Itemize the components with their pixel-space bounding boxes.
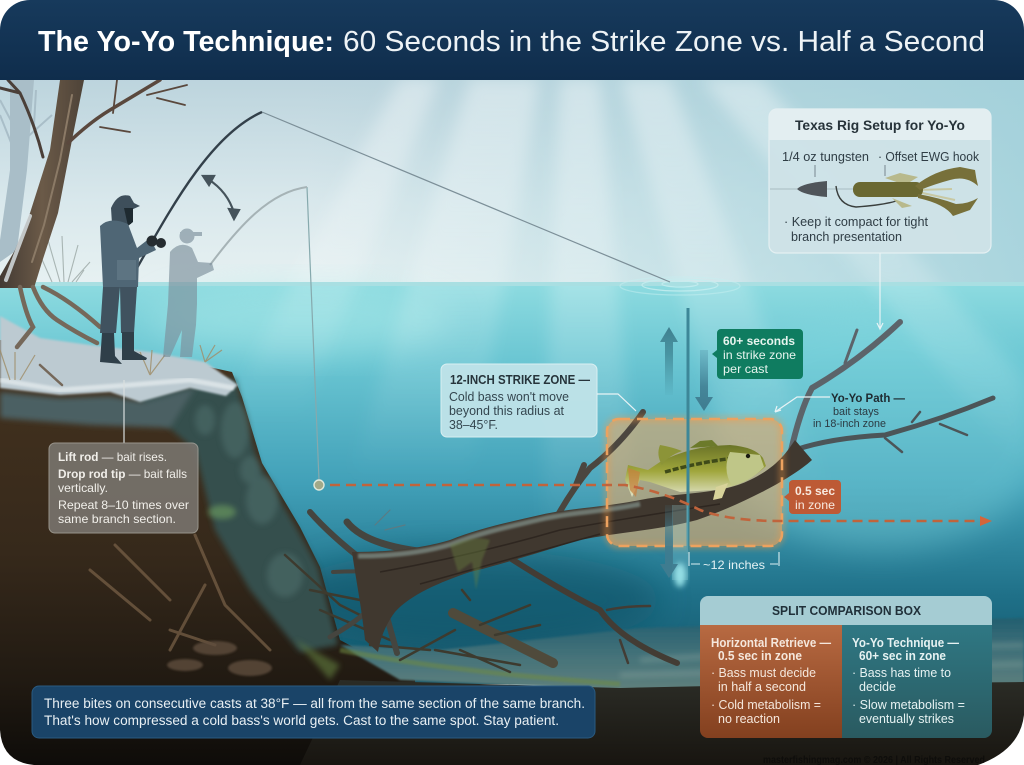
label: Yo-Yo Path: Yo-Yo Path — xyxy=(831,391,905,405)
quote box: Three bites on consecutive casts at 38°F — all from the same section of the same branch. xyxy=(44,696,585,711)
limb: left upright branch xyxy=(558,412,643,515)
split comparison box xyxy=(700,596,992,738)
callout: 60+ seconds: per cast xyxy=(723,362,769,376)
grass tufts xyxy=(0,345,222,380)
rod 2 ghost xyxy=(210,187,307,265)
title: 60 Seconds in the Strike Zone vs. Half a Second xyxy=(343,26,985,58)
panel: horizontal retrieve: · Bass must decide xyxy=(711,666,816,680)
panel: yo-yo technique: eventually strikes xyxy=(859,712,954,726)
leader: yo-yo path xyxy=(775,397,830,412)
panel: horizontal retrieve: · Cold metabolism = xyxy=(711,698,821,712)
quote box xyxy=(32,686,595,738)
callout: 0.5 sec: 0.5 sec xyxy=(795,484,835,498)
callout: 60+ seconds: in strike zone xyxy=(723,348,796,362)
bait circle and rod line xyxy=(307,187,324,490)
callout: 12-inch strike zone: beyond this radius at xyxy=(449,404,565,418)
callout: lift rod instructions: vertically. xyxy=(58,481,108,495)
callout: Texas Rig Setup: · Keep it compact for tight xyxy=(784,215,929,229)
callout: 12-inch strike zone: 12-INCH STRIKE ZONE — xyxy=(450,373,590,387)
snow bank xyxy=(0,316,238,428)
callout: 60+ seconds: 60+ seconds xyxy=(723,334,795,348)
panel: yo-yo technique xyxy=(842,625,992,738)
callout: lift rod instructions: Lift rod — bait rises. xyxy=(58,450,167,464)
panel: yo-yo technique: Yo-Yo Technique — xyxy=(852,636,959,650)
callout: Texas Rig Setup: · Offset EWG hook xyxy=(878,150,980,164)
angler xyxy=(100,195,166,364)
horizontal retrieve dashed path with arrow xyxy=(330,485,992,526)
moss on trunk xyxy=(450,538,490,590)
surface ripples xyxy=(620,277,740,295)
water surface line xyxy=(0,282,1024,286)
callout: lift rod instructions: Drop rod tip — bait falls xyxy=(58,467,187,481)
main rod line xyxy=(262,112,670,282)
background: winter sky xyxy=(0,78,1024,286)
limb: upper right branch xyxy=(790,322,900,455)
callout: lift rod instructions: same branch section. xyxy=(58,512,176,526)
rod motion arrow xyxy=(203,176,239,219)
icon: soft plastic craw bait xyxy=(853,167,978,216)
callout: Texas Rig Setup: 1/4 oz tungsten xyxy=(782,150,869,164)
sunken tree: main trunk and limbs xyxy=(310,322,993,663)
leader: lift rod xyxy=(123,380,125,443)
callout: 0.5 sec xyxy=(784,480,841,514)
label: Yo-Yo Path: bait stays xyxy=(833,406,879,418)
largemouth bass xyxy=(625,440,766,500)
callout: Texas Rig Setup xyxy=(769,109,991,253)
panel: yo-yo technique: decide xyxy=(859,680,896,694)
callout: Texas Rig Setup: Texas Rig Setup for Yo-Yo xyxy=(795,118,965,133)
dry grass behind tree xyxy=(40,236,90,282)
title bar xyxy=(0,0,1024,80)
panel: yo-yo technique: 60+ sec in zone xyxy=(859,649,946,663)
background tree pale xyxy=(0,80,52,262)
strike zone rectangle xyxy=(607,419,782,546)
title: The Yo-Yo Technique: xyxy=(38,26,334,58)
tree xyxy=(0,80,187,288)
fallen branch pile xyxy=(285,555,553,672)
panel: horizontal retrieve: Horizontal Retrieve — xyxy=(711,636,831,650)
rod 1 xyxy=(137,112,262,268)
arrow: up xyxy=(660,327,678,395)
panel: horizontal retrieve: in half a second xyxy=(718,680,806,694)
limb: lower right xyxy=(510,558,677,663)
callout: 12-inch strike zone: Cold bass won't move xyxy=(449,390,569,404)
dimension: 12 inches xyxy=(689,552,779,572)
bank soil and rock face xyxy=(0,340,420,765)
background: sun rays xyxy=(264,80,1018,503)
roots at left xyxy=(310,510,425,653)
strike zone fill xyxy=(607,419,782,546)
title xyxy=(38,30,984,57)
leader: strike zone xyxy=(597,394,636,411)
callout: 0.5 sec: in zone xyxy=(795,498,835,512)
arrow: down mid xyxy=(695,350,713,411)
main trunk xyxy=(352,440,812,652)
quote box: That's how compressed a cold bass's world gets. Cast to the same spot. Stay patient. xyxy=(44,713,559,728)
callout: lift rod instructions: Repeat 8–10 times over xyxy=(58,498,189,512)
arrow: down bottom xyxy=(660,505,688,587)
limb: far right branch xyxy=(795,398,993,452)
panel: yo-yo technique: · Slow metabolism = xyxy=(852,698,965,712)
lake bed sediment xyxy=(340,618,1024,690)
callout: lift rod instructions xyxy=(49,443,198,533)
callout: Texas Rig Setup: branch presentation xyxy=(791,230,902,244)
background: underwater gradient xyxy=(0,284,1024,684)
leader from rig to branch xyxy=(877,253,883,329)
dimension: 12 inches: ~12 inches xyxy=(703,558,765,572)
panel: horizontal retrieve: no reaction xyxy=(718,712,780,726)
panel: yo-yo technique: · Bass has time to xyxy=(852,666,951,680)
icon: tungsten weight and line xyxy=(770,181,896,207)
lake bottom soil xyxy=(300,680,1024,765)
panel: horizontal retrieve xyxy=(700,625,842,738)
panel: horizontal retrieve: 0.5 sec in zone xyxy=(718,649,802,663)
label: Yo-Yo Path: in 18-inch zone xyxy=(813,418,886,430)
tree roots xyxy=(17,287,100,385)
vertical fishing line with bait path xyxy=(686,308,690,554)
ghost angler: lowered rod xyxy=(163,228,214,357)
callout: 60+ seconds xyxy=(712,329,803,379)
label: Yo-Yo Path xyxy=(813,391,905,430)
callout: 12-inch strike zone xyxy=(441,364,597,437)
callout: 12-inch strike zone: 38–45°F. xyxy=(449,418,498,432)
split comparison box: SPLIT COMPARISON BOX xyxy=(772,604,922,618)
